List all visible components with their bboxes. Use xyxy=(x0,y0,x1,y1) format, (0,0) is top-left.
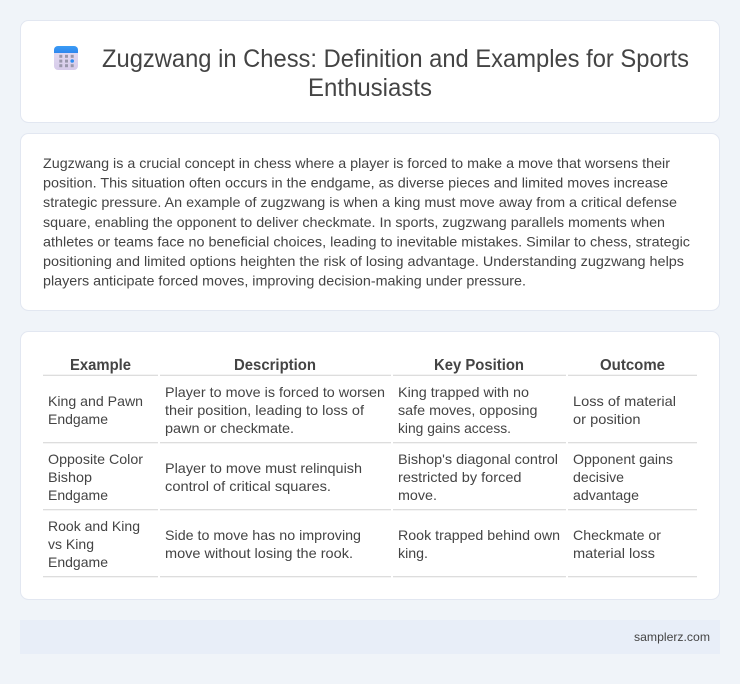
table row: Rook and King vs King Endgame: material loss xyxy=(573,545,655,561)
table row: Rook and King vs King Endgame: vs King xyxy=(48,536,94,552)
text block: definition paragraph xyxy=(43,155,690,288)
table row: King and Pawn Endgame: king gains access. xyxy=(398,420,511,436)
table row: Rook and King vs King Endgame: Endgame xyxy=(48,554,108,570)
text block: definition paragraph: positioning and limited options heighten the risk of losing advantage. Understanding zugzwang helps xyxy=(43,253,684,269)
table header: Example xyxy=(70,357,131,374)
table row: Opposite Color Bishop Endgame: Opponent gains xyxy=(573,451,673,467)
table row: Rook and King vs King Endgame: king. xyxy=(398,545,428,561)
text block: definition paragraph: players anticipate forced moves, improving decision-making under pressure. xyxy=(43,272,526,288)
table row: Rook and King vs King Endgame: Rook trapped behind own xyxy=(398,527,560,543)
table row: Opposite Color Bishop Endgame: Bishop's diagonal control xyxy=(398,451,558,467)
table row: King and Pawn Endgame: Endgame xyxy=(48,411,108,427)
table row: Opposite Color Bishop Endgame: Opposite Color xyxy=(48,451,143,467)
table row: Rook and King vs King Endgame xyxy=(43,518,697,577)
title: Zugzwang in Chess: Definition and Examples for Sports xyxy=(102,45,689,73)
table row: Opposite Color Bishop Endgame: advantage xyxy=(573,487,639,503)
table row: Rook and King vs King Endgame: Checkmate or xyxy=(573,527,661,543)
table row: Rook and King vs King Endgame: Rook and King xyxy=(48,518,140,534)
text block: definition paragraph: athletes or teams face no beneficial choices, leading to inevitable mistakes. Similar to chess, strategic xyxy=(43,234,690,250)
icon: calendar xyxy=(54,46,78,70)
text block: definition paragraph: strategic pressure. An example of zugzwang is when a king must move away from a critical defense xyxy=(43,194,677,210)
table row: Rook and King vs King Endgame: Side to move has no improving xyxy=(165,527,361,543)
text block: definition paragraph: square, enabling the opponent to deliver checkmate. In sports, zugzwang parallels moments when xyxy=(43,214,665,230)
table row: Opposite Color Bishop Endgame: control of critical squares. xyxy=(165,478,331,494)
footer xyxy=(20,620,720,654)
table row: King and Pawn Endgame: Loss of material xyxy=(573,393,676,409)
table header xyxy=(43,357,697,376)
table row: King and Pawn Endgame: King and Pawn xyxy=(48,393,143,409)
text block: definition paragraph: Zugzwang is a crucial concept in chess where a player is forced to make a move that worsens their xyxy=(43,155,670,171)
table row: Opposite Color Bishop Endgame: Bishop xyxy=(48,469,92,485)
table header: Description xyxy=(234,357,316,374)
table row: Opposite Color Bishop Endgame: decisive xyxy=(573,469,624,485)
table row: King and Pawn Endgame: Player to move is forced to worsen xyxy=(165,384,385,400)
title xyxy=(102,45,689,102)
table row: King and Pawn Endgame: their position, leading to loss of xyxy=(165,402,364,418)
table row: King and Pawn Endgame: King trapped with no xyxy=(398,384,529,400)
table row: Opposite Color Bishop Endgame xyxy=(43,451,697,510)
footer: samplerz.com xyxy=(634,630,710,644)
table row: Opposite Color Bishop Endgame: move. xyxy=(398,487,437,503)
table row: King and Pawn Endgame xyxy=(43,384,697,443)
panel: introduction xyxy=(20,134,720,310)
panel: title header xyxy=(20,20,720,122)
text block: definition paragraph: position. This situation often occurs in the endgame, as diverse pieces and limited moves increase xyxy=(43,174,668,190)
table row: Opposite Color Bishop Endgame: Player to move must relinquish xyxy=(165,460,362,476)
table header: Outcome xyxy=(600,357,665,374)
table row: King and Pawn Endgame: safe moves, opposing xyxy=(398,402,538,418)
table row: King and Pawn Endgame: pawn or checkmate. xyxy=(165,420,294,436)
table row: King and Pawn Endgame: or position xyxy=(573,411,640,427)
table row: Opposite Color Bishop Endgame: restricted by forced xyxy=(398,469,522,485)
table header: Key Position xyxy=(434,357,524,374)
panel: examples table xyxy=(20,332,720,600)
table row: Opposite Color Bishop Endgame: Endgame xyxy=(48,487,108,503)
title: Enthusiasts xyxy=(308,74,432,102)
table row: Rook and King vs King Endgame: move without losing the rook. xyxy=(165,545,353,561)
